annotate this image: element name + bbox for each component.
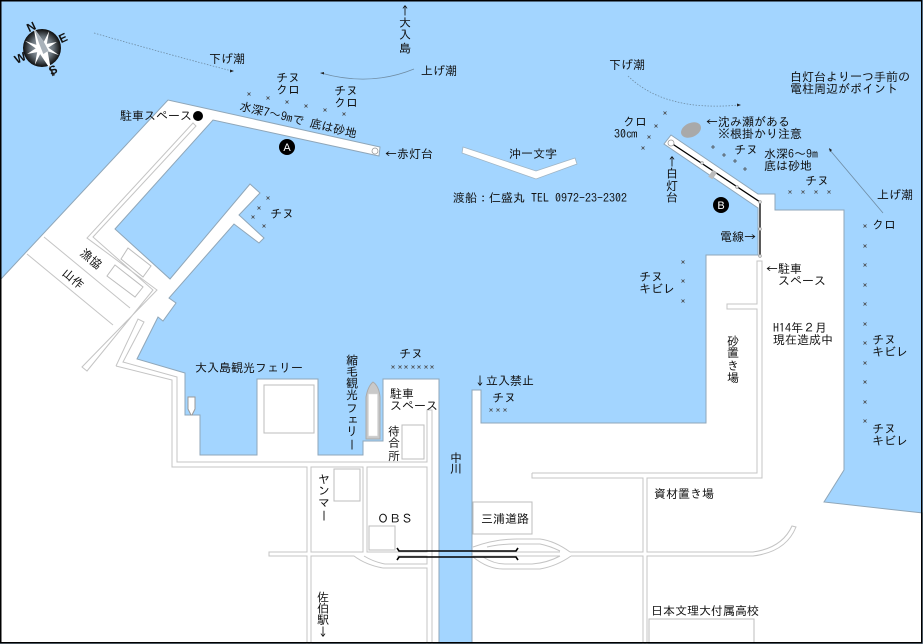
label: ferry boat contact: 渡船：仁盛丸 TEL 0972-23-2302 [453,191,627,204]
label: no entry: ↓立入禁止 [474,375,534,387]
label: sunken rock note: ←沈み瀬がある [706,116,790,128]
label: Yamasaku: 山作 [60,267,86,291]
label: kuro 30cm: クロ [623,116,647,128]
fishing points east [788,190,830,194]
label: kuro 30cm: 30㎝ [614,128,638,140]
fishing points inner basin [682,260,684,302]
label: ebb tide east: 下げ潮 [609,59,645,71]
fishing points outer seawall [864,224,866,422]
label: sand yard: 砂置き場 [727,335,739,384]
label: parking south: スペース [390,400,438,412]
label: red lighthouse: ←赤灯台 [385,148,433,160]
label: to Saiki station: ↓ [317,626,329,638]
label: OBS: ＯＢＳ [377,513,413,525]
label: outer seawall species 2: キビレ [872,435,908,447]
buildings [107,248,754,643]
marker B: B [717,200,725,212]
label: fishing cooperative: 漁協 [78,247,104,271]
red lighthouse marker [372,148,378,154]
label: parking east: ←駐車 [766,263,802,275]
label: flood tide east: 上げ潮 [877,189,913,201]
label: to Onyu island: ↑ [399,4,411,17]
fishing points inner jetty [252,196,270,228]
road network [82,123,796,644]
label: kuro east: クロ [872,219,896,231]
label: species east: チヌ [805,175,829,187]
icon: compass rose: E [56,30,70,46]
label: species near no entry: チヌ [492,392,516,404]
fishing points along white lighthouse jetty [711,145,747,171]
current arrow: flood tide east [829,149,883,213]
label: outer seawall species 2: チヌ [872,423,896,435]
label: to Onyu island: 大入島 [399,17,411,54]
label: Onyujima tourist ferry: 大入島観光フェリー [195,361,303,374]
label: offshore breakwater: 沖一文字 [509,148,557,160]
label: depth east: 水深6～9m [764,148,818,160]
parking dot [193,111,203,121]
label: fish species north 2: チヌ [334,85,358,97]
label: under construction: 現在造成中 [773,334,833,346]
current arrow: ebb tide west [94,33,232,71]
fishing points near ferry [392,366,434,368]
sunken rock [679,119,703,141]
fishing points along red lighthouse jetty [248,92,346,116]
label: power line: 電線→ [720,230,756,243]
label: parking west: 駐車スペース [120,110,192,122]
label: to Saiki station: 佐伯駅 [317,590,329,626]
label: point note: 白灯台より一つ手前の [790,71,910,83]
icon: compass rose [12,19,71,83]
small ferry boat [188,397,195,415]
label: outer seawall species 1: チヌ [872,334,896,346]
label: white lighthouse: ↑ [666,155,678,168]
label: inner jetty species: チヌ [270,208,294,220]
label: fish species north 2: クロ [334,97,358,109]
label: species at white lighthouse jetty: チヌ [734,144,758,156]
label: ebb tide west: 下げ潮 [209,53,245,65]
icon: compass rose: W [12,49,29,67]
label: inner basin species: キビレ [639,283,675,295]
power line with poles [668,140,761,257]
ferry deck [368,394,378,436]
label: Naka river: 中川 [450,451,462,475]
label: fish species north 1: クロ [276,84,300,96]
icon: compass rose: N [24,19,38,35]
bridge [397,548,518,560]
label: depth east: 底は砂地 [764,160,812,172]
label: parking east: スペース [778,275,826,287]
label: outer seawall species 1: キビレ [872,346,908,358]
label: sunken rock note: ※根掛かり注意 [718,127,802,140]
property lines [27,237,130,325]
label: Yanmar: ヤンマー [318,472,330,520]
label: waiting room: 待合所 [388,425,400,462]
icon: compass rose: S [46,62,60,78]
label: depth at red lighthouse jetty: 水深7～9mで 底は砂地 [239,100,358,140]
label: inner basin species: チヌ [639,271,663,283]
fishing points near white lighthouse [642,112,666,150]
label: Kusuge tourist ferry: 縮毛観光フェリー [346,353,358,449]
label: parking south: 駐車 [390,388,414,400]
label: Miura road company: 三浦道路 [481,513,529,525]
large ferry boat [366,382,380,439]
marker A: A [283,142,291,154]
label: flood tide north: 上げ潮 [421,65,457,77]
offshore breakwater [462,147,577,179]
label: under construction: H14年２月 [773,322,827,334]
current arrow: flood tide north [321,69,414,79]
marker A [279,139,295,155]
label: materials yard: 資材置き場 [654,488,714,500]
label: high school: 日本文理大付属高校 [651,604,759,617]
label: fish species north 1: チヌ [276,72,300,84]
label: white lighthouse: 白灯台 [666,167,678,203]
marker B [713,197,729,213]
label: point note: 電柱周辺がポイント [790,82,898,95]
fishing points near no entry [490,408,506,412]
label: species near ferry: チヌ [399,348,423,360]
current arrowheads [230,70,832,152]
current arrow: ebb tide east [628,76,739,106]
